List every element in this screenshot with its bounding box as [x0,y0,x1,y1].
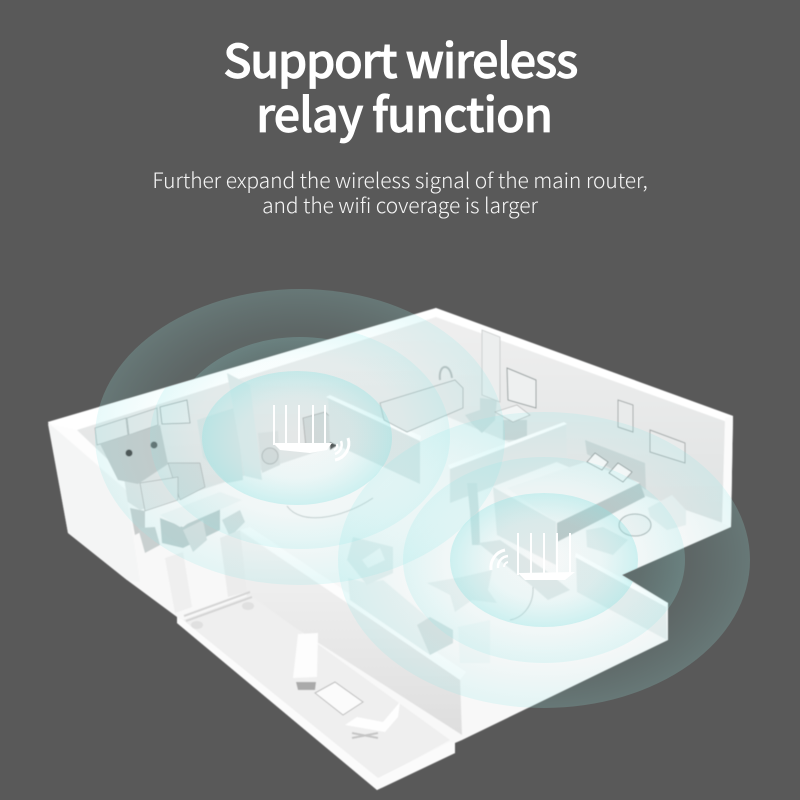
house floor [48,308,733,790]
door [482,330,500,402]
kitchen cupboards [95,400,190,484]
bedroom divider top [448,422,567,469]
power cords [287,498,533,620]
floor lamp [467,483,480,545]
divider top [326,395,421,441]
star rug [427,570,497,612]
kitchen island [138,492,245,553]
round table [619,514,651,536]
kitchen counters [130,463,205,535]
balcony ledge [184,592,252,621]
signal rings behind house [95,289,750,708]
right wall end [722,416,733,527]
router body left [273,443,332,453]
mirror [507,368,536,408]
subtitle: Further expand the wireless signal of the main router, [152,165,648,195]
right wall top [575,553,668,607]
sofa [348,578,453,655]
folding chair [345,702,400,738]
sink [495,405,530,440]
wall top edges [48,308,733,430]
bed [507,453,645,542]
bedroom stool [586,527,628,555]
bathroom divider wall [328,398,420,484]
headboard [585,440,646,490]
wifi arcs right [491,550,508,570]
title: relay function [256,77,552,146]
fridge [197,407,243,483]
signal rings over house [95,289,750,708]
living room right wall [576,556,667,640]
armchair [347,537,393,585]
title: Support wireless [223,23,577,92]
router left [273,405,349,460]
coffee table [315,682,363,715]
long wall to balcony [240,531,462,735]
floor plan house [48,308,733,790]
balcony floor [183,595,450,780]
lounge chair [293,633,318,690]
balcony front edge [177,618,455,790]
long wall outer cap [240,527,466,680]
bedroom armchair [648,495,686,530]
laundry pillar [227,373,262,480]
bedroom divider wall [450,424,567,503]
antennas right [518,533,570,575]
antennas left [274,405,325,445]
left wall top edge [50,424,126,490]
router body right [518,572,575,580]
ottoman [458,620,490,663]
router right [491,533,575,580]
subtitle: and the wifi coverage is larger [262,190,538,220]
left wall outer face [48,424,140,582]
wifi arcs left [334,438,349,460]
tv stand [478,540,570,600]
back right wall [436,316,726,524]
bed footboard [493,487,556,565]
toilet [465,398,497,433]
bathtub [380,367,463,432]
wall pictures [618,400,685,463]
short wall two [220,530,247,597]
short wall one [165,552,192,613]
back left wall [60,316,436,510]
washing machine [258,412,340,473]
balcony pots [191,602,254,629]
